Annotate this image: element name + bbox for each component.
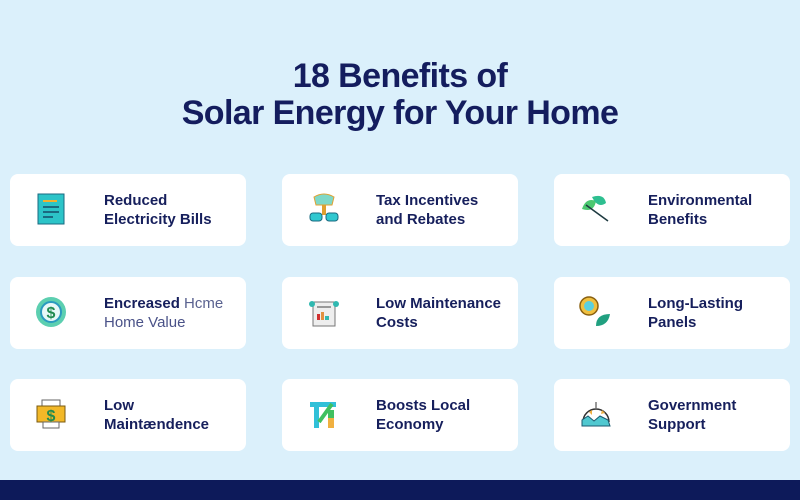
icon: tax bbox=[310, 194, 338, 222]
text: Reduced bbox=[104, 192, 167, 209]
text: Panels bbox=[648, 314, 696, 331]
text: Economy bbox=[376, 416, 444, 433]
text bbox=[376, 397, 470, 433]
card: low maintenance bbox=[10, 379, 246, 451]
text: Boosts Local bbox=[376, 397, 470, 414]
text: Low bbox=[104, 397, 134, 414]
card: boosts local economy bbox=[282, 379, 518, 451]
card: reduced electricity bills bbox=[10, 174, 246, 246]
card: low maintenance costs bbox=[282, 277, 518, 349]
text bbox=[376, 192, 478, 228]
text bbox=[104, 295, 223, 331]
text: Home Value bbox=[104, 314, 185, 331]
text: Costs bbox=[376, 314, 418, 331]
text: Support bbox=[648, 416, 706, 433]
footer bar bbox=[0, 480, 800, 500]
card: environmental benefits bbox=[554, 174, 790, 246]
card: increased home value bbox=[10, 277, 246, 349]
text bbox=[648, 192, 752, 228]
text: Maintændence bbox=[104, 416, 209, 433]
text bbox=[104, 397, 209, 433]
text: Long-Lasting bbox=[648, 295, 743, 312]
icon: coin and leaf bbox=[579, 296, 610, 326]
text: and Rebates bbox=[376, 211, 465, 228]
text: Tax Incentives bbox=[376, 192, 478, 209]
icon: dome bbox=[582, 402, 611, 426]
text: Benefits bbox=[648, 211, 707, 228]
text: Low Maintenance bbox=[376, 295, 501, 312]
text: Environmental bbox=[648, 192, 752, 209]
card: long-lasting panels bbox=[554, 277, 790, 349]
icon: report bbox=[309, 301, 339, 326]
icon: dollar bill: $ bbox=[47, 408, 56, 425]
icon: bars bbox=[310, 402, 336, 428]
text bbox=[648, 295, 743, 331]
text bbox=[376, 295, 501, 331]
icon: dollar bill bbox=[36, 400, 66, 428]
text: Government bbox=[648, 397, 736, 414]
text bbox=[104, 192, 212, 228]
title bbox=[182, 57, 618, 132]
icon: dollar coin bbox=[36, 297, 66, 327]
card: tax incentives bbox=[282, 174, 518, 246]
text: Electricity Bills bbox=[104, 211, 212, 228]
text bbox=[648, 397, 736, 433]
title: Solar Energy for Your Home bbox=[182, 94, 618, 132]
icon: dollar coin: $ bbox=[47, 305, 56, 322]
icon: leaves bbox=[582, 196, 608, 222]
card: government support bbox=[554, 379, 790, 451]
title: 18 Benefits of bbox=[293, 57, 507, 95]
text: Encreased Hcme bbox=[104, 295, 223, 312]
icon: bill document bbox=[38, 194, 64, 224]
